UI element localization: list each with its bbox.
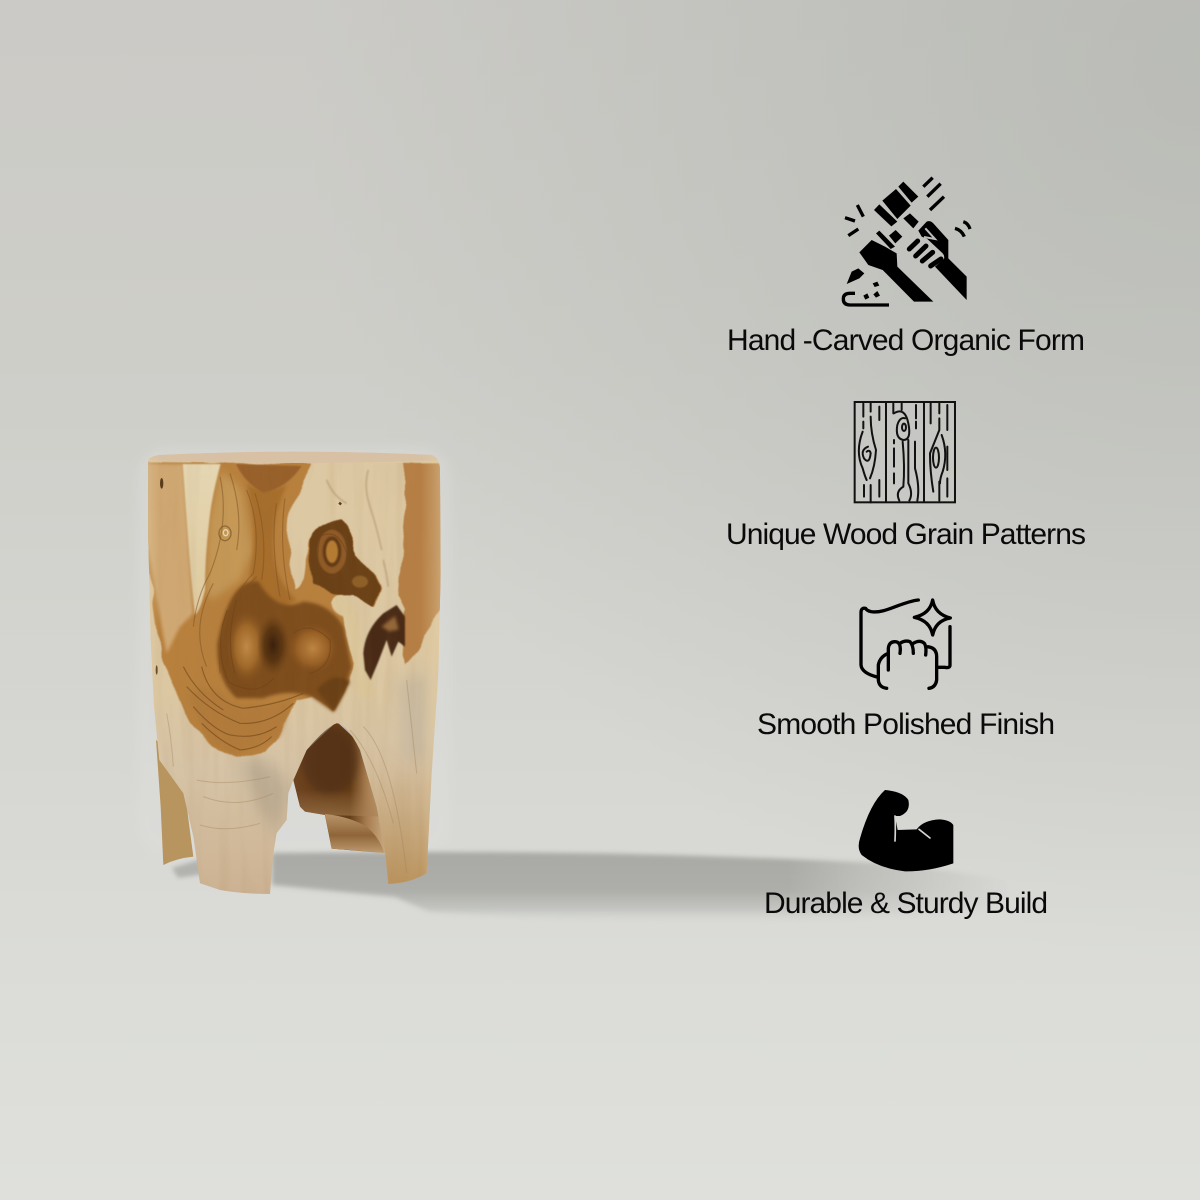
thumb cut line <box>924 228 935 239</box>
stool top surface <box>150 452 438 464</box>
burl lower lobe <box>317 677 350 712</box>
feature: smooth polished finish <box>757 600 1055 741</box>
heartwood main mass with left band <box>143 462 382 758</box>
right burl eye <box>292 628 333 668</box>
icon: hand polishing cloth <box>861 600 950 688</box>
wood chips <box>863 282 880 300</box>
sparkle <box>914 600 950 635</box>
stool body <box>148 452 441 894</box>
lower orange rings zone <box>207 712 290 746</box>
back left leg <box>156 740 197 865</box>
right leg tone <box>370 765 432 884</box>
wood figure <box>143 448 443 897</box>
inner arch back wall <box>293 722 387 853</box>
wooden stool <box>143 448 443 897</box>
wall lower tone <box>293 757 387 817</box>
feature: unique wood grain patterns <box>726 402 1086 551</box>
feature: durable and sturdy build <box>764 790 1048 920</box>
left band lighter tone <box>147 463 193 653</box>
wood edges with organic outline <box>143 462 443 758</box>
rim highlight edges <box>148 462 440 674</box>
pale inlet finger <box>330 594 355 669</box>
upper knot core <box>317 530 347 574</box>
fist fingers <box>909 241 941 266</box>
cloth <box>861 600 918 677</box>
pale grain <box>167 680 417 873</box>
upper knot body <box>307 519 381 607</box>
trunk flow orange <box>248 485 296 604</box>
label: Durable & Sturdy Build <box>764 887 1048 920</box>
icon: wood planks <box>855 402 955 502</box>
dark specks <box>156 478 342 675</box>
chisel block <box>889 230 902 243</box>
icon: flexed arm <box>859 790 953 871</box>
left hand and arm <box>859 240 933 302</box>
label: Unique Wood Grain Patterns <box>726 518 1086 551</box>
floor shadow <box>172 850 968 916</box>
soft halo behind stool <box>137 447 451 853</box>
work surface line <box>843 293 889 305</box>
upper heartwood lighter tone <box>205 470 253 600</box>
heartwood flow lines <box>193 473 290 673</box>
right dark burl <box>363 605 405 680</box>
hand <box>888 641 937 688</box>
small knot <box>219 526 231 541</box>
muscle highlight lines <box>895 816 930 841</box>
wall dark upper depth <box>302 725 358 795</box>
icon: hammer and chisel hands <box>843 178 970 305</box>
left leg shadow <box>172 858 205 878</box>
burl mass <box>217 581 352 712</box>
burl dark core <box>258 618 287 672</box>
upper knot lower lobe <box>352 576 368 588</box>
centre leg cool shading <box>240 758 290 833</box>
hammer handle <box>903 213 919 228</box>
hammer head <box>898 182 918 203</box>
chisel strip <box>876 231 895 249</box>
growth rings <box>183 534 347 750</box>
right heartwood band <box>398 463 443 663</box>
fine wood grain texture <box>399 463 402 480</box>
left burl eye <box>231 617 261 676</box>
main cast shadow <box>271 850 968 916</box>
back wall lower lip <box>325 814 384 853</box>
label: Hand -Carved Organic Form <box>727 324 1085 357</box>
chisel tip <box>847 268 864 284</box>
label: Smooth Polished Finish <box>757 708 1055 741</box>
right pale cool patch <box>397 673 430 760</box>
pale zone upper right streaks <box>327 470 388 587</box>
cream sapwood strip <box>183 464 221 615</box>
right fist and arm <box>918 221 967 300</box>
top surface rim <box>150 452 437 463</box>
top knot <box>236 464 302 493</box>
sparks <box>845 178 970 237</box>
feature: hand-carved organic form <box>727 178 1085 357</box>
